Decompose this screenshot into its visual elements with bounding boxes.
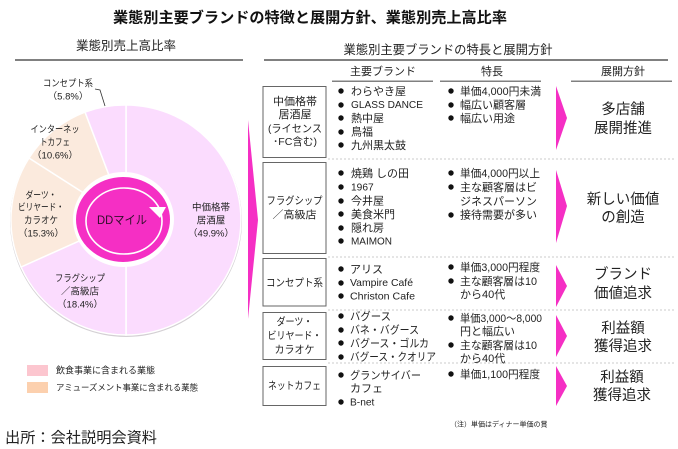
policy text: 価値追求	[594, 285, 652, 302]
brand list: 1967	[351, 182, 374, 194]
heading: brand characteristics: 業態別主要ブランドの特長と展開方針	[343, 42, 553, 57]
category box	[263, 258, 326, 306]
label: darts billiards karaoke: ダーツ・	[26, 190, 56, 202]
brand list: グランサイバー	[350, 368, 421, 382]
characteristics list: 単価4,000円未満	[460, 84, 541, 98]
heading: sales ratio: 業態別売上高比率	[76, 38, 176, 53]
policy text	[594, 100, 652, 137]
brand list: MAIMON	[351, 236, 392, 248]
column header: policy: 展開方針	[601, 64, 645, 78]
policy text	[587, 191, 659, 226]
label: concept: コンセプト系	[43, 78, 93, 90]
slice: flagship 18.4%	[21, 220, 126, 335]
characteristics list: 幅広い用途	[460, 112, 515, 125]
characteristics list	[448, 166, 540, 222]
characteristics list: 接待需要が多い	[460, 208, 537, 222]
brand list: Vampire Café	[350, 278, 413, 289]
category box	[263, 162, 326, 254]
column header: characteristics: 特長	[481, 64, 503, 78]
policy text	[593, 369, 651, 404]
brand list: アリス	[350, 264, 383, 276]
brand list: バグース・クオリア	[350, 350, 436, 364]
category box: ダーツ・	[276, 315, 312, 328]
category box: カラオケ	[274, 344, 314, 356]
label: flagship	[55, 272, 105, 310]
policy text: の創造	[601, 209, 645, 226]
brand list: カフェ	[350, 382, 383, 395]
characteristics list	[448, 311, 542, 365]
characteristics list: 単価1,100円程度	[460, 367, 540, 381]
arrow: large pink connector	[248, 120, 258, 319]
policy text: 獲得追求	[594, 338, 652, 355]
characteristics list	[448, 260, 540, 301]
characteristics list: 主な顧客層は10	[460, 274, 537, 288]
category box	[263, 366, 326, 406]
label: darts billiards karaoke	[18, 190, 64, 240]
brand list: 熱中屋	[351, 112, 384, 125]
slice: concept 5.8%	[85, 105, 126, 220]
category box: 居酒屋	[278, 108, 312, 121]
label: internet cafe: （10.6%）	[32, 150, 78, 162]
policy text: 利益額	[601, 320, 645, 337]
slice: internet cafe 10.6%	[29, 112, 126, 220]
row: darts billiards karaoke	[263, 309, 652, 365]
column header: main brands: 主要ブランド	[350, 64, 416, 78]
policy text	[594, 265, 652, 302]
policy text: ブランド	[594, 265, 652, 283]
characteristics list: 単価3,000円程度	[460, 260, 540, 274]
label: darts billiards karaoke: （15.3%）	[18, 228, 64, 240]
slice: darts billiards karaoke 15.3%	[11, 158, 126, 267]
characteristics list: 主な顧客層は10	[460, 338, 537, 352]
title: 業態別主要ブランドの特徴と展開方針、業態別売上高比率	[113, 8, 507, 26]
brand list: 今井屋	[351, 194, 384, 208]
policy text: 新しい価値	[587, 191, 659, 208]
center badge: DD Mile: DDマイル	[97, 213, 147, 227]
brand list	[338, 264, 415, 302]
policy text	[594, 320, 652, 355]
category box: コンセプト系	[266, 277, 323, 289]
characteristics list	[448, 84, 541, 125]
brand list: GLASS DANCE	[351, 100, 423, 111]
characteristics list: ジネスパーソン	[460, 195, 537, 208]
brand list: B-net	[350, 398, 375, 408]
brand list: 焼鶏 しの田	[351, 166, 409, 180]
brand list	[338, 85, 423, 152]
chevron	[556, 170, 567, 243]
brand list: Christon Cafe	[350, 292, 415, 302]
characteristics list: から40代	[460, 288, 505, 301]
category box: (ライセンス	[268, 123, 322, 135]
pie chart	[10, 105, 242, 337]
label: internet cafe	[30, 124, 80, 162]
label: flagship: （18.4%）	[57, 298, 103, 310]
policy text: 獲得追求	[593, 387, 651, 404]
policy text: 展開推進	[594, 120, 652, 137]
category box: フラグシップ	[266, 194, 323, 207]
label: flagship: ／高級店	[61, 286, 99, 298]
panel: sales ratio by format	[10, 38, 243, 393]
brand list: 隠れ房	[351, 222, 384, 234]
label: mid-price izakaya: 居酒屋	[197, 216, 225, 226]
label: darts billiards karaoke: ビリヤード・	[18, 202, 64, 214]
policy text: 多店舗	[601, 100, 645, 118]
characteristics list: から40代	[460, 352, 505, 365]
chevron	[556, 265, 567, 307]
characteristics list: 単価3,000～8,000	[460, 311, 542, 325]
label: concept: （5.8%）	[48, 90, 88, 102]
legend: 飲食事業に含まれる業態	[56, 364, 155, 376]
row: mid-price izakaya	[263, 84, 652, 158]
label: darts billiards karaoke: カラオケ	[24, 216, 58, 226]
brand list	[338, 368, 421, 408]
characteristics list: 主な顧客層はビ	[460, 180, 537, 194]
category box: ･FC含む)	[273, 136, 317, 148]
source: 出所：会社説明会資料	[5, 430, 157, 446]
chevron	[556, 366, 567, 406]
legend	[27, 364, 198, 393]
brand list	[338, 166, 409, 248]
characteristics list: 円と幅広い	[460, 325, 515, 338]
column header: main brands	[332, 64, 433, 82]
policy text: 利益額	[600, 369, 644, 386]
slice: mid-price izakaya 49.9%	[126, 105, 241, 335]
center badge: DD Mile	[73, 172, 174, 267]
category box: ／高級店	[272, 208, 316, 221]
panel: brand characteristics and policy	[263, 42, 676, 428]
category box: ネットカフェ	[268, 380, 321, 392]
brand list: わらやき屋	[351, 85, 406, 98]
brand list: 九州黒太鼓	[351, 138, 406, 152]
legend: アミューズメント事業に含まれる業態	[56, 382, 198, 392]
category box	[263, 86, 326, 158]
column header: characteristics	[440, 64, 541, 82]
label: internet cafe: インターネッ	[30, 124, 80, 136]
brand list: バネ・バグース	[350, 322, 419, 336]
label: concept	[43, 78, 105, 106]
label: internet cafe: トカフェ	[40, 138, 70, 148]
row: net cafe	[263, 366, 651, 408]
row: concept	[263, 258, 652, 307]
label: mid-price izakaya: 中価格帯	[192, 202, 230, 214]
column header: policy	[571, 64, 672, 82]
footnote: （注）単価はディナー単価の賞	[450, 420, 548, 428]
brand list: バグース・ゴルカ	[350, 336, 429, 350]
brand list	[338, 309, 436, 364]
category box	[263, 312, 326, 360]
category box: ビリヤード・	[268, 330, 322, 342]
characteristics list: 幅広い顧客層	[460, 98, 526, 112]
chevron	[556, 86, 567, 150]
label: mid-price izakaya: （49.9%）	[188, 228, 234, 240]
label: mid-price izakaya	[188, 202, 234, 240]
brand list: 美食米門	[351, 208, 395, 221]
row: flagship	[263, 162, 659, 254]
chevron	[556, 315, 567, 357]
brand list: 鳥福	[351, 124, 373, 138]
category box: 中価格帯	[273, 94, 317, 108]
label: flagship: フラグシップ	[55, 272, 105, 284]
characteristics list: 単価4,000円以上	[460, 166, 540, 180]
brand list: バグース	[350, 309, 391, 323]
